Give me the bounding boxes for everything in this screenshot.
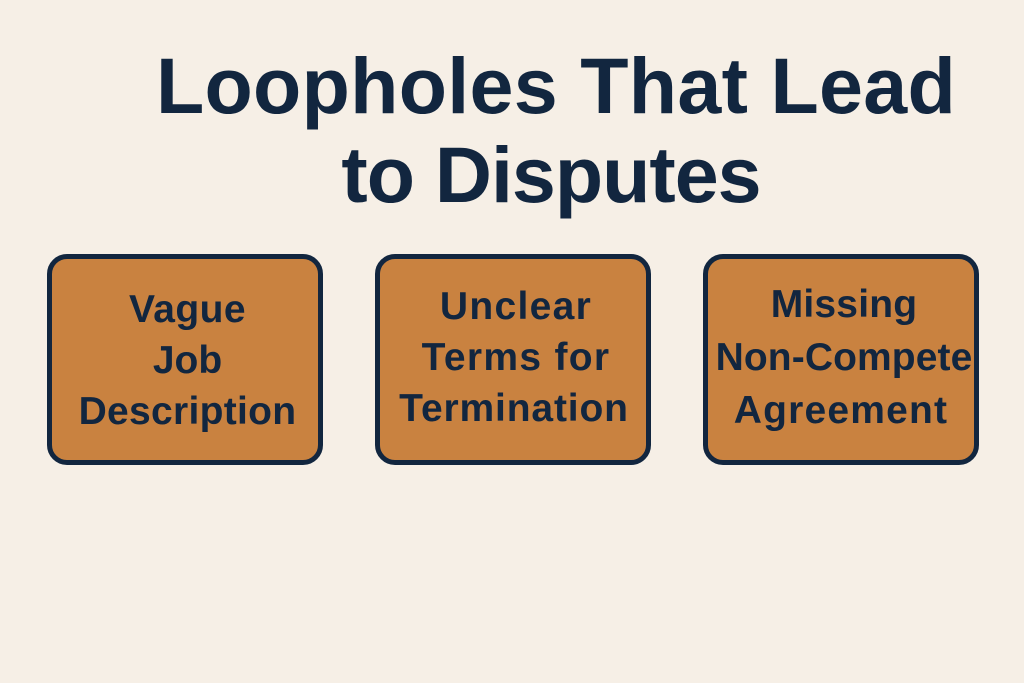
text: missing non-compete agreement: Missing [771, 283, 917, 326]
text: unclear terms for termination: Unclear [440, 285, 592, 328]
title: Loopholes That Lead [156, 41, 956, 130]
panel: unclear terms for termination [375, 254, 651, 465]
text: vague job description: Description [79, 390, 296, 433]
text: vague job description: Vague [129, 288, 246, 331]
title [156, 41, 956, 219]
text: unclear terms for termination: Terms for [422, 336, 610, 379]
text: missing non-compete agreement [716, 283, 972, 432]
panel: missing non-compete agreement [703, 254, 979, 465]
title: to Disputes [341, 130, 761, 219]
panel: vague job description [47, 254, 323, 465]
text: vague job description [79, 288, 296, 433]
text: unclear terms for termination [399, 285, 629, 430]
text: missing non-compete agreement: Non-Compete [716, 336, 972, 379]
text: unclear terms for termination: Termination [399, 387, 629, 430]
text: missing non-compete agreement: Agreement [734, 389, 948, 432]
text: vague job description: Job [153, 339, 222, 382]
